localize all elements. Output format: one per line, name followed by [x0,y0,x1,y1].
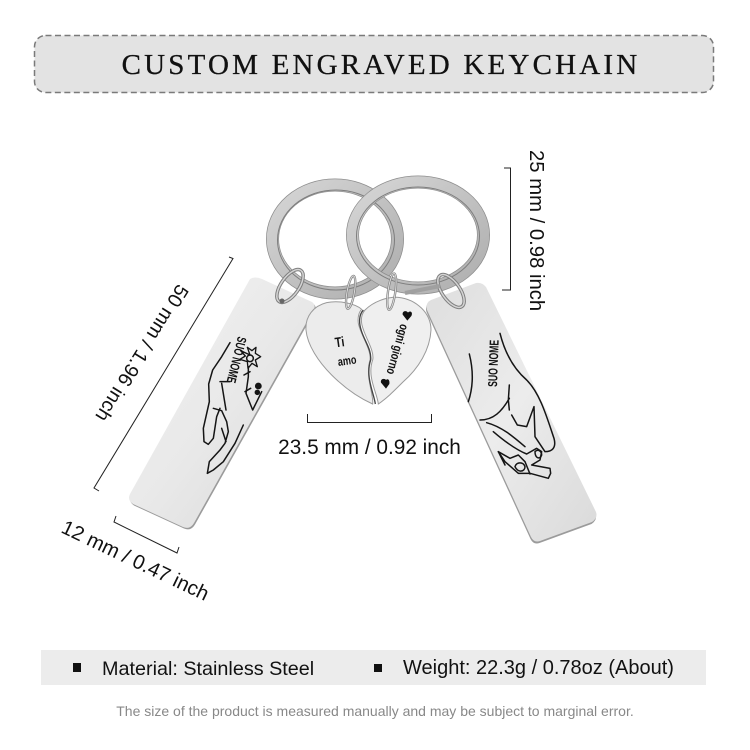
engraved: Ti amo [334,333,357,369]
title: CUSTOM ENGRAVED KEYCHAIN [122,49,640,81]
bullet: material [73,663,81,672]
split ring: left tag [272,265,308,307]
engraved: Ti amo: Ti [334,333,345,350]
footnote: The size of the product is measured manually and may be subject to marginal error. [116,703,634,719]
material text: Material: Stainless Steel [102,658,314,680]
dimension: heart 23.5 mm: 23.5 mm / 0.92 inch [278,436,461,459]
spec bar [41,650,706,685]
right bar tag [426,283,596,544]
left heart half [306,302,373,404]
weight text: Weight: 22.3g / 0.78oz (About) [403,657,674,679]
engraved: Ti amo: amo [337,353,357,369]
split ring: right tag [405,270,469,312]
jump rings: heart [344,273,398,310]
icon: hearts [381,311,412,389]
dimension: tag 50 mm [90,257,233,491]
engraved: ogni giorno: ogni giorno [383,323,411,376]
bullet: weight [374,664,382,672]
engraved name: right tag: SUO NOME [485,339,502,387]
seam [360,310,375,404]
title banner [34,36,714,92]
engraving: hand and flower [203,343,262,473]
key ring: left [272,185,398,293]
dimension: heart 23.5 mm [278,414,461,459]
dimension: ring 25 mm: 25 mm / 0.98 inch [525,150,547,311]
key ring: right [352,182,484,288]
engraving: holding hands [468,333,555,478]
dimension: tag 12 mm: 12 mm / 0.47 inch [58,517,212,606]
dimension: ring 25 mm [502,150,547,311]
dimension: tag 50 mm: 50 mm / 1.96 inch [90,280,192,425]
right heart half [361,297,431,404]
engraved name: left tag: SUO NOME [224,335,250,385]
left bar tag [129,278,316,529]
heart pendant [306,273,431,404]
